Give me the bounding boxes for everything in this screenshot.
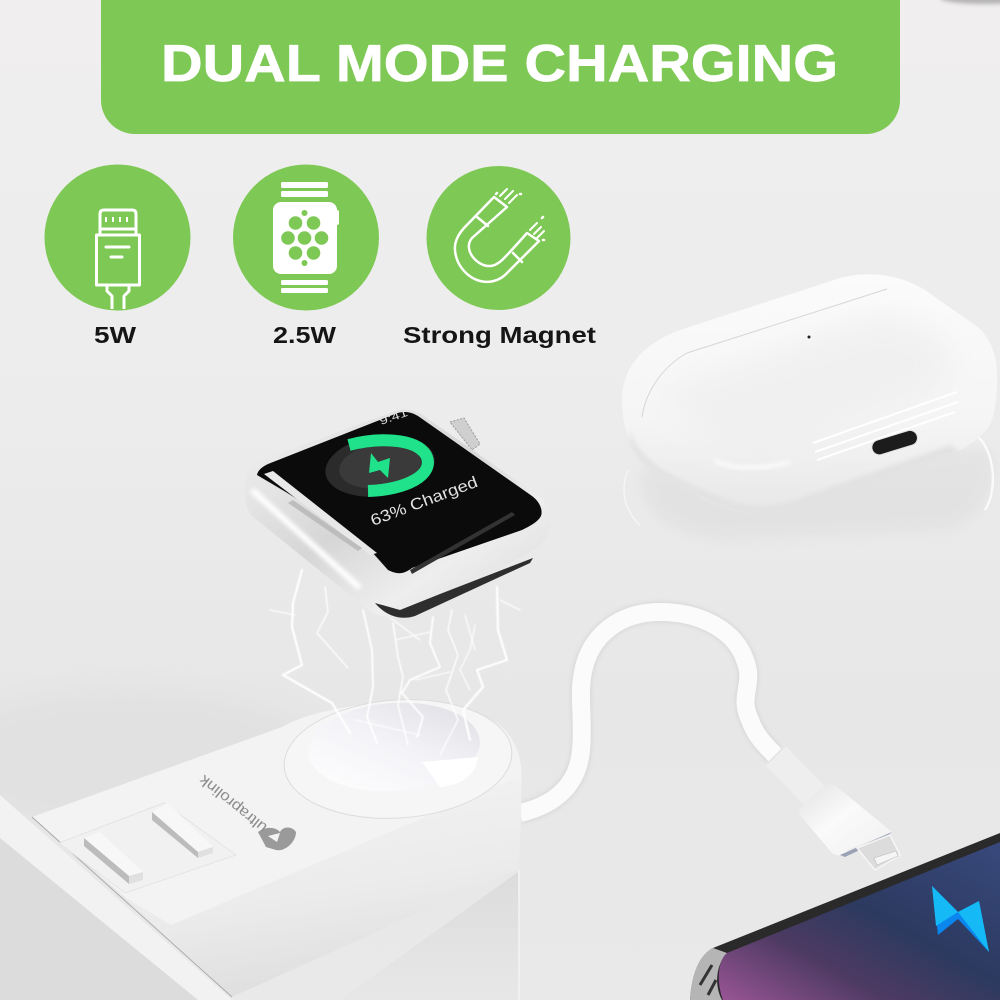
label: 2.5W: 2.5W — [273, 322, 336, 348]
lightning arcs — [270, 570, 520, 755]
charge bolt — [369, 453, 390, 478]
phone screen — [719, 842, 1000, 1000]
charge status: 63% Charged — [368, 474, 480, 530]
clock time: 9:41 — [378, 407, 409, 428]
phone frame — [690, 833, 1000, 1000]
smartphone — [690, 833, 1000, 1000]
watch case — [245, 410, 550, 618]
brand logo — [196, 771, 296, 850]
smart watch — [245, 407, 550, 618]
feature: 2.5W watch — [233, 164, 379, 348]
watch crown — [450, 418, 480, 450]
phone bolt logo — [932, 886, 989, 952]
feature: 5W lightning cable — [44, 164, 190, 348]
icon: smart watch — [273, 182, 339, 293]
screen glare — [264, 471, 377, 555]
wall charger with wireless pad — [32, 692, 522, 1000]
plug prongs — [84, 803, 213, 884]
watch screen — [257, 412, 542, 573]
wireless earbuds case — [622, 274, 997, 540]
status led — [808, 336, 810, 338]
lightning plug — [799, 784, 900, 870]
feature: strong magnet — [403, 166, 596, 348]
charge ring — [349, 440, 428, 491]
cable strain relief — [776, 756, 815, 796]
icon: lightning connector — [96, 210, 140, 309]
title: DUAL MODE CHARGING — [161, 35, 838, 93]
brand logo: ultraprolink — [196, 771, 271, 836]
watch underside — [375, 558, 533, 618]
wireless charging pad — [280, 692, 516, 826]
charger body — [32, 703, 522, 997]
charge ring track — [321, 429, 439, 503]
charging port — [870, 429, 919, 457]
label: 5W: 5W — [94, 322, 136, 348]
label: Strong Magnet: Strong Magnet — [403, 322, 596, 348]
charging cable — [520, 612, 900, 870]
header banner — [101, 0, 900, 134]
table corner — [0, 795, 232, 1000]
icon: horseshoe magnet — [455, 189, 544, 282]
prong plate — [59, 803, 236, 893]
